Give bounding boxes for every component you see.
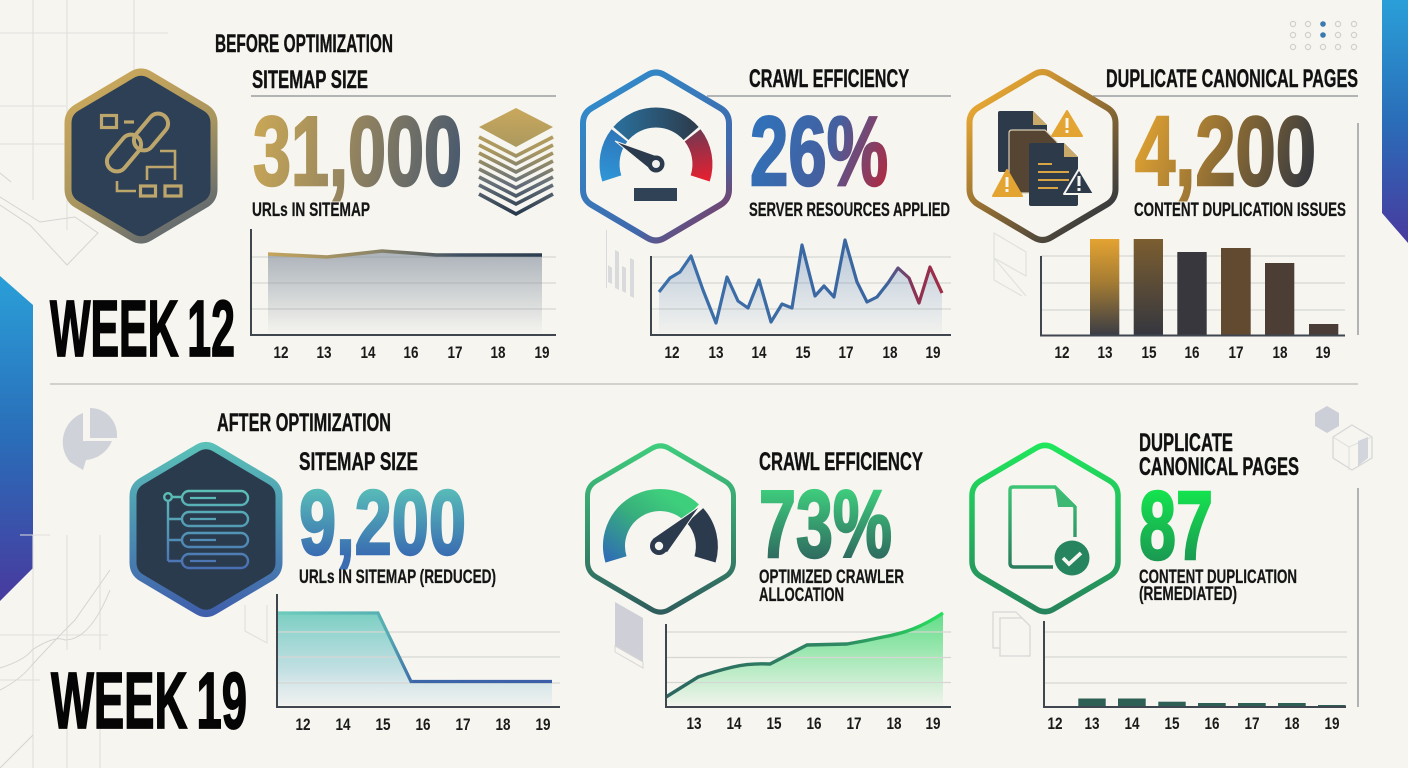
area chart: sitemap size week 19: 19 <box>536 715 550 734</box>
bar chart: duplicate pages week 12: 12 <box>1054 343 1070 362</box>
area chart: sitemap size week 19: 12 <box>296 715 310 734</box>
value: 9,200: 9,200 <box>299 472 466 574</box>
caption: URLs IN SITEMAP <box>252 199 370 221</box>
area chart: sitemap size week 12: 19 <box>534 343 550 362</box>
icon: link hexagon <box>68 72 214 240</box>
bar chart: duplicate pages week 19: 16 <box>1204 714 1220 733</box>
panel: sitemap size before <box>68 66 556 362</box>
title: SITEMAP SIZE <box>299 448 418 476</box>
line chart: crawl efficiency week 12: 14 <box>752 343 767 362</box>
area chart: sitemap size week 19: 16 <box>416 715 430 734</box>
area chart: sitemap size week 12 <box>251 229 556 362</box>
caption <box>1139 566 1297 605</box>
decorative bottom-left grid and curves <box>0 535 110 768</box>
area chart: crawl efficiency week 19: 18 <box>886 714 902 733</box>
line chart: crawl efficiency week 12: 13 <box>708 343 724 362</box>
line chart: crawl efficiency week 12: 19 <box>926 343 940 362</box>
bar chart: duplicate pages week 19: 19 <box>1324 714 1340 733</box>
title: CRAWL EFFICIENCY <box>749 65 909 93</box>
caption: (REMEDIATED) <box>1139 583 1237 605</box>
icon: verified document hexagon <box>972 445 1118 612</box>
area chart: sitemap size week 19 <box>277 594 560 734</box>
section divider <box>50 383 1358 385</box>
bar chart: duplicate pages week 19: 14 <box>1124 714 1140 733</box>
area chart: sitemap size week 12: 17 <box>448 343 462 362</box>
value: 31,000: 31,000 <box>253 96 462 206</box>
value: 87: 87 <box>1139 471 1213 580</box>
icon: gauge hexagon <box>583 73 729 240</box>
panel: duplicate canonical pages before <box>970 65 1358 362</box>
right ribbon accent <box>1382 0 1408 243</box>
area chart: sitemap size week 19: 14 <box>336 715 351 734</box>
left ribbon accent <box>0 276 33 601</box>
bar chart: duplicate pages week 19 <box>1044 621 1347 733</box>
area chart: sitemap size week 12: 18 <box>490 343 506 362</box>
bar chart: duplicate pages week 12: 13 <box>1098 343 1112 362</box>
title rule <box>251 95 556 97</box>
decorative dot matrix <box>1290 21 1357 50</box>
bar chart: duplicate pages week 12: 15 <box>1142 343 1156 362</box>
value: 26%: 26% <box>750 96 888 206</box>
icon: gauge hexagon green <box>588 446 734 612</box>
icon: duplicate documents hexagon <box>970 72 1116 240</box>
area chart: crawl efficiency week 19: 17 <box>846 714 862 733</box>
caption: OPTIMIZED CRAWLER <box>759 566 904 588</box>
caption: URLs IN SITEMAP (REDUCED) <box>299 566 496 588</box>
line chart: crawl efficiency week 12 <box>651 240 951 362</box>
line chart: crawl efficiency week 12: 15 <box>796 343 810 362</box>
area chart: sitemap size week 12: 14 <box>360 343 376 362</box>
bar chart: duplicate pages week 19: 18 <box>1284 714 1300 733</box>
bar chart: duplicate pages week 12: 16 <box>1184 343 1200 362</box>
decorative sketch <box>245 605 267 643</box>
panel: sitemap size after <box>133 446 560 734</box>
area chart: crawl efficiency week 19: 14 <box>726 714 742 733</box>
area chart: sitemap size week 12: 12 <box>274 343 288 362</box>
area chart: crawl efficiency week 19: 19 <box>926 714 940 733</box>
panel: crawl efficiency before <box>583 65 951 362</box>
title: SITEMAP SIZE <box>252 66 368 94</box>
title: DUPLICATE <box>1139 429 1233 457</box>
value: 4,200: 4,200 <box>1135 96 1316 206</box>
area chart: sitemap size week 19: 17 <box>456 715 470 734</box>
bar chart: duplicate pages week 19: 17 <box>1244 714 1260 733</box>
area chart: crawl efficiency week 19: 15 <box>766 714 782 733</box>
decorative documents <box>993 612 1030 656</box>
caption: SERVER RESOURCES APPLIED <box>749 199 950 221</box>
decorative panel sketch <box>994 233 1026 296</box>
decorative pie icon <box>63 408 117 470</box>
icon: stacked layers <box>479 108 553 214</box>
bar chart: duplicate pages week 12 <box>1041 239 1345 362</box>
heading: week 19: WEEK 19 <box>51 656 247 745</box>
decorative hexagon cube <box>1315 406 1372 470</box>
caption: CONTENT DUPLICATION <box>1139 566 1297 588</box>
area chart: sitemap size week 19: 18 <box>496 715 510 734</box>
title: CRAWL EFFICIENCY <box>759 448 923 476</box>
bar chart: duplicate pages week 12: 19 <box>1316 343 1330 362</box>
bar chart: duplicate pages week 12: 18 <box>1272 343 1288 362</box>
title rule <box>1093 95 1358 97</box>
bar chart: duplicate pages week 12: 17 <box>1228 343 1244 362</box>
area chart: sitemap size week 12: 16 <box>404 343 418 362</box>
area chart: sitemap size week 12: 13 <box>316 343 332 362</box>
decorative mini bars <box>606 230 634 298</box>
heading: after optimization: AFTER OPTIMIZATION <box>217 409 391 437</box>
area chart: sitemap size week 19: 15 <box>376 715 390 734</box>
right rule <box>1357 488 1359 707</box>
line chart: crawl efficiency week 12: 12 <box>664 343 680 362</box>
area chart: crawl efficiency week 19: 13 <box>686 714 702 733</box>
decorative block <box>615 602 643 668</box>
panel: crawl efficiency after <box>588 446 951 733</box>
heading: week 12: WEEK 12 <box>50 284 235 373</box>
decorative top-left grid and lines <box>0 0 168 265</box>
value: 73%: 73% <box>759 471 892 578</box>
area chart: crawl efficiency week 19: 16 <box>806 714 822 733</box>
bar chart: duplicate pages week 19: 15 <box>1164 714 1180 733</box>
line chart: crawl efficiency week 12: 17 <box>838 343 854 362</box>
caption <box>759 566 904 606</box>
bar chart: duplicate pages week 19: 13 <box>1084 714 1100 733</box>
title rule <box>707 95 951 97</box>
panel: duplicate canonical pages after <box>972 406 1372 733</box>
area chart: crawl efficiency week 19 <box>666 613 951 733</box>
right rule <box>1357 123 1359 335</box>
title: CANONICAL PAGES <box>1139 453 1299 481</box>
icon: structured list hexagon <box>133 446 279 613</box>
caption: ALLOCATION <box>759 584 844 606</box>
bar chart: duplicate pages week 19: 12 <box>1048 714 1062 733</box>
title <box>1139 429 1299 481</box>
line chart: crawl efficiency week 12: 18 <box>882 343 898 362</box>
heading: before optimization: BEFORE OPTIMIZATION <box>215 30 393 58</box>
